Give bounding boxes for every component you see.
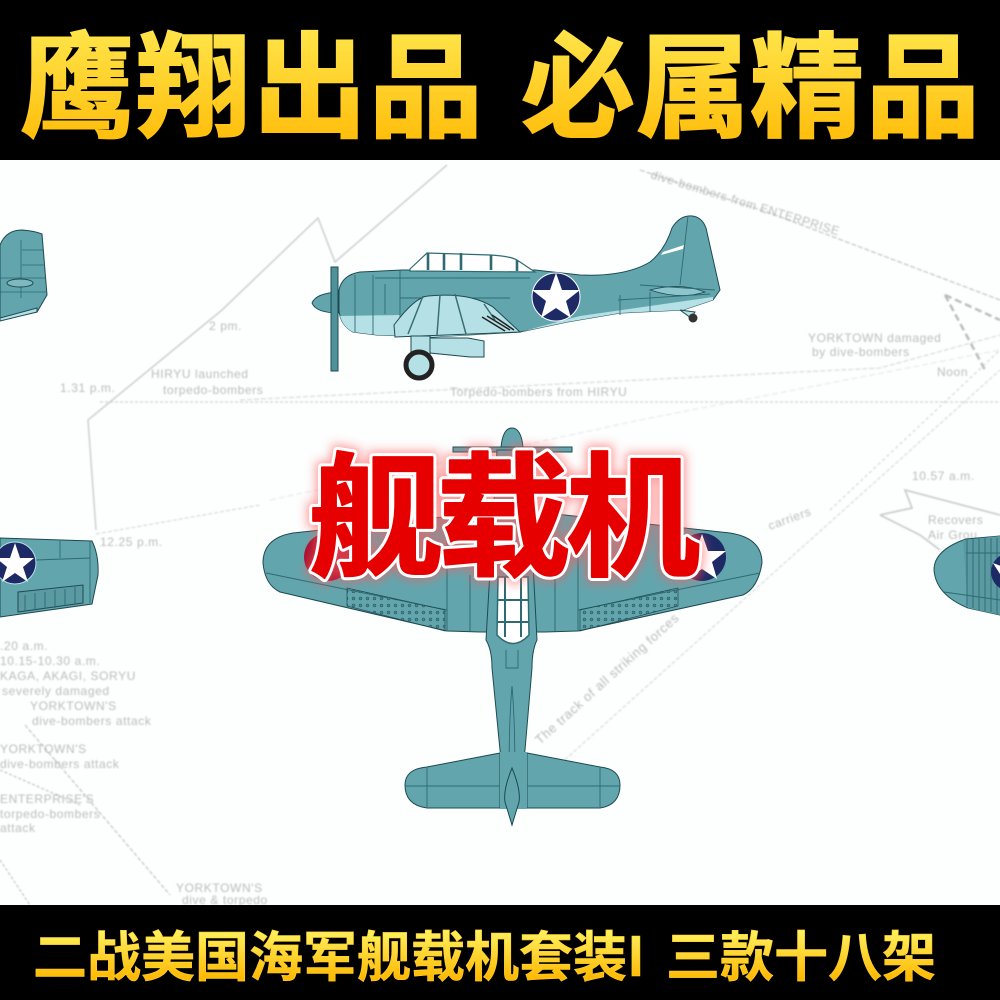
dive flaps [347,588,678,631]
map labels: attack [0,821,36,835]
map labels: torpedo-bombers [0,807,100,821]
nose and propeller [453,428,572,452]
main heading: carrier aircraft: 舰载机 [309,410,700,604]
map labels: KAGA, AKAGI, SORYU [0,669,136,683]
fuselage and fin [339,216,720,337]
plane: side view [312,216,720,378]
map labels: 1.31 p.m. [60,381,115,395]
roundel with star [0,542,36,584]
map labels: Recovers [928,513,983,527]
plane: left partial wing [0,538,98,617]
fuselage [486,450,537,825]
map labels: Noon [937,365,968,379]
main wing [263,512,762,632]
map labels: 12.25 p.m. [100,535,163,549]
cockpit [497,577,529,644]
map labels: 10.15-10.30 a.m. [0,654,100,668]
tail wheel [680,310,698,322]
map labels: ENTERPRISE'S [0,792,94,806]
map labels: 2 pm. [209,319,242,333]
map labels [0,167,983,907]
tailplane [405,752,620,825]
main heading: carrier aircraft: 舰载机 [309,410,700,604]
roundel with star [532,273,580,321]
map labels: YORKTOWN'S [0,742,87,756]
slogan: 鹰翔出品必属精品 [20,0,980,161]
plane: top view [263,428,762,825]
subtitle: 二战美国海军舰载机套装I三款十八架 [33,913,936,992]
map labels: Air Grou [928,528,977,542]
map labels: severely damaged [2,684,110,698]
map labels: by dive-bombers [812,345,910,359]
wing [394,294,520,337]
map labels: dive-bombers from ENTERPRISE [649,167,841,238]
map labels: Torpedo-bombers from HIRYU [450,385,627,399]
map labels: torpedo-bombers [163,383,263,397]
map labels: 10.57 a.m. [912,469,975,483]
map labels: dive & torpedo [182,893,268,907]
map labels: HIRYU launched [151,367,249,381]
spinner and propeller [312,267,339,371]
map labels: dive-bombers attack [0,757,120,771]
map labels: YORKTOWN damaged [808,331,941,345]
roundels [304,533,726,581]
main heading: carrier aircraft: 舰载机 [309,410,700,604]
map track lines [0,165,1000,905]
map labels: carriers [766,504,813,533]
plane: right partial wing [934,536,1000,615]
plane: left partial tail [0,230,47,321]
landing gear and bomb [406,336,484,378]
bottom banner [0,905,1000,1000]
canopy [410,253,535,272]
map labels: YORKTOWN'S [176,881,263,895]
map labels: .20 a.m. [0,639,48,653]
top banner [0,0,1000,161]
map labels: The track of all striking forces [532,610,682,747]
map labels: YORKTOWN'S [30,699,117,713]
map labels: dive-bombers attack [32,714,152,728]
